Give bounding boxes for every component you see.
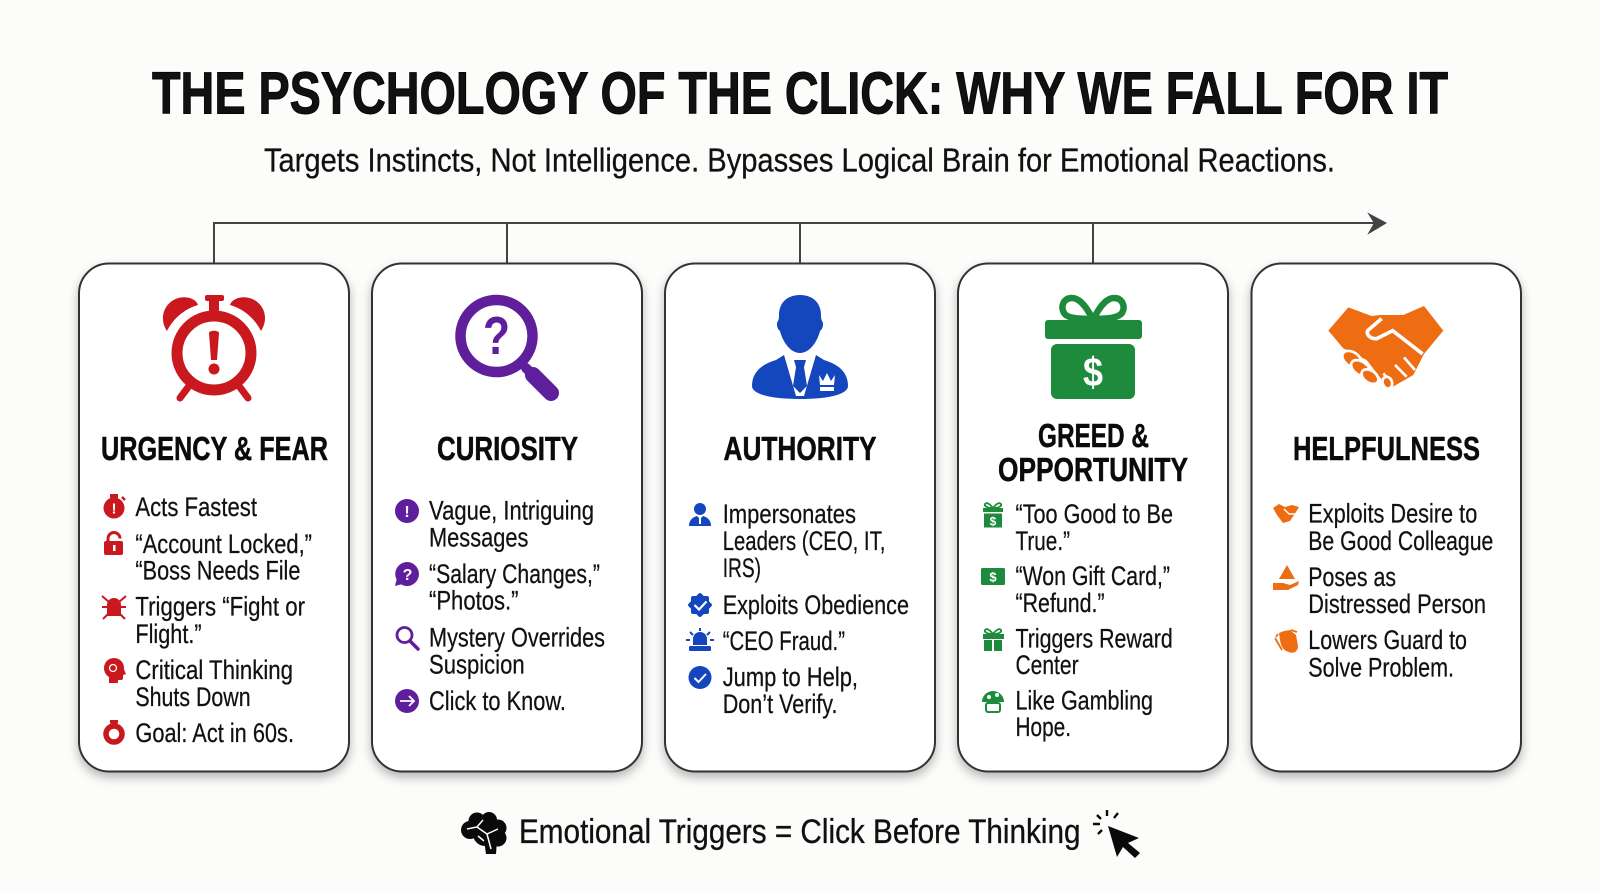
card outline (372, 264, 642, 772)
bullet: vague messages: Messages (429, 523, 528, 553)
bullet: vague messages: Vague, Intriguing (429, 496, 594, 526)
bullet: acts fastest: Acts Fastest (135, 492, 258, 522)
bullet: vague messages (395, 496, 594, 553)
bullet: too good: $ (990, 514, 997, 528)
panel: greed and opportunity (958, 264, 1228, 772)
text: Emotional Triggers = Click Before Thinking (519, 813, 1080, 851)
bullet: jump to help: Jump to Help, (723, 662, 858, 692)
heading (998, 417, 1188, 488)
bullet: salary changes (395, 559, 600, 616)
bullet: poses as: Poses as (1308, 562, 1396, 592)
subtitle: Targets Instincts, Not Intelligence. Bypasses Logical Brain for Emotional Reactions. (264, 142, 1335, 179)
bullet: ceo fraud: “CEO Fraud.” (723, 626, 845, 656)
bullet: reward center: Triggers Reward (1016, 624, 1173, 654)
bullet: fight or flight (102, 592, 305, 649)
bullet: too good: “Too Good to Be (1016, 499, 1173, 529)
bullet: acts fastest (104, 492, 258, 522)
bullet: gift card: $ (989, 570, 997, 584)
panel: authority (665, 264, 935, 772)
card outline (79, 264, 349, 772)
bullet: impersonates: Impersonates (723, 499, 856, 529)
bullet: gift card: “Refund.” (1016, 588, 1105, 618)
bullet: jump to help (688, 662, 858, 719)
bullet: lowers guard (1275, 625, 1467, 683)
bullet: click to know (395, 686, 566, 716)
bullet: account locked: “Account Locked,” (135, 529, 312, 559)
bullet: poses as: Distressed Person (1308, 589, 1486, 619)
icon: magnifying glass (460, 300, 551, 393)
heading: GREED & (1038, 417, 1149, 454)
bullet: exploits desire: Be Good Colleague (1308, 526, 1493, 556)
bullet: too good: True.” (1016, 526, 1070, 556)
bullet: impersonates (689, 499, 885, 583)
bullet: gambling: Hope. (1016, 712, 1071, 742)
heading: CURIOSITY (437, 430, 578, 467)
icon: magnifying glass: ? (483, 306, 510, 366)
bullet: lowers guard: Solve Problem. (1308, 653, 1454, 683)
bullet: critical thinking: Shuts Down (135, 682, 251, 712)
bullet: mystery (397, 622, 605, 679)
bullet: exploits obedience: Exploits Obedience (723, 590, 909, 620)
bullet: critical thinking: Critical Thinking (135, 655, 293, 685)
icon: executive (752, 295, 848, 399)
bullet: reward center: Center (1016, 650, 1079, 680)
bullet: mystery: Mystery Overrides (429, 622, 605, 652)
icon: gift with dollar: $ (1083, 349, 1103, 395)
bullet: ceo fraud (686, 626, 845, 656)
icon: handshake (1328, 306, 1443, 390)
heading: AUTHORITY (724, 430, 876, 467)
bullet: vague messages: ! (404, 504, 410, 521)
panel: helpfulness (1252, 264, 1521, 772)
bullet: goal: Goal: Act in 60s. (135, 718, 294, 748)
panel: curiosity (372, 264, 642, 772)
bullet: click to know: Click to Know. (429, 686, 566, 716)
bullet: mystery: Suspicion (429, 649, 525, 679)
bullet: jump to help: Don’t Verify. (723, 689, 838, 719)
heading: HELPFULNESS (1293, 430, 1480, 467)
icon: alarm clock (163, 295, 265, 398)
bullet: gift card (981, 561, 1170, 618)
bullet: reward center (983, 624, 1173, 680)
bullet: exploits desire: Exploits Desire to (1308, 499, 1477, 529)
bullet: account locked (104, 529, 312, 586)
bullet: exploits desire (1273, 499, 1493, 556)
bullet: too good (983, 499, 1173, 556)
bullet: account locked: “Boss Needs File (135, 556, 300, 586)
icon: brain (461, 812, 506, 854)
bullet: gambling (982, 686, 1153, 742)
bullet: acts fastest: ! (112, 500, 116, 518)
bullet: critical thinking (104, 655, 293, 712)
footer message (461, 810, 1140, 858)
bullet: salary changes: “Salary Changes,” (429, 559, 600, 589)
card outline (1252, 264, 1521, 772)
bullet: salary changes: “Photos.” (429, 586, 518, 616)
panel: urgency and fear (79, 264, 349, 772)
bullet: salary changes: ? (403, 567, 412, 584)
bullet: impersonates: IRS) (723, 553, 761, 583)
bullet: impersonates: Leaders (CEO, IT, (723, 526, 885, 556)
icon: gift with dollar (1045, 298, 1142, 399)
bullet: poses as (1273, 562, 1486, 619)
bullet: gift card: “Won Gift Card,” (1016, 561, 1170, 591)
heading: OPPORTUNITY (998, 451, 1188, 488)
arrow: timeline connector (214, 215, 1385, 263)
heading: URGENCY & FEAR (101, 430, 328, 467)
bullet: fight or flight: Triggers “Fight or (135, 592, 305, 622)
card outline (958, 264, 1228, 772)
card outline (665, 264, 935, 772)
icon: cursor click (1093, 810, 1140, 858)
bullet: fight or flight: Flight.” (135, 619, 202, 649)
bullet: gambling: Like Gambling (1016, 686, 1153, 716)
bullet: lowers guard: Lowers Guard to (1308, 625, 1467, 655)
